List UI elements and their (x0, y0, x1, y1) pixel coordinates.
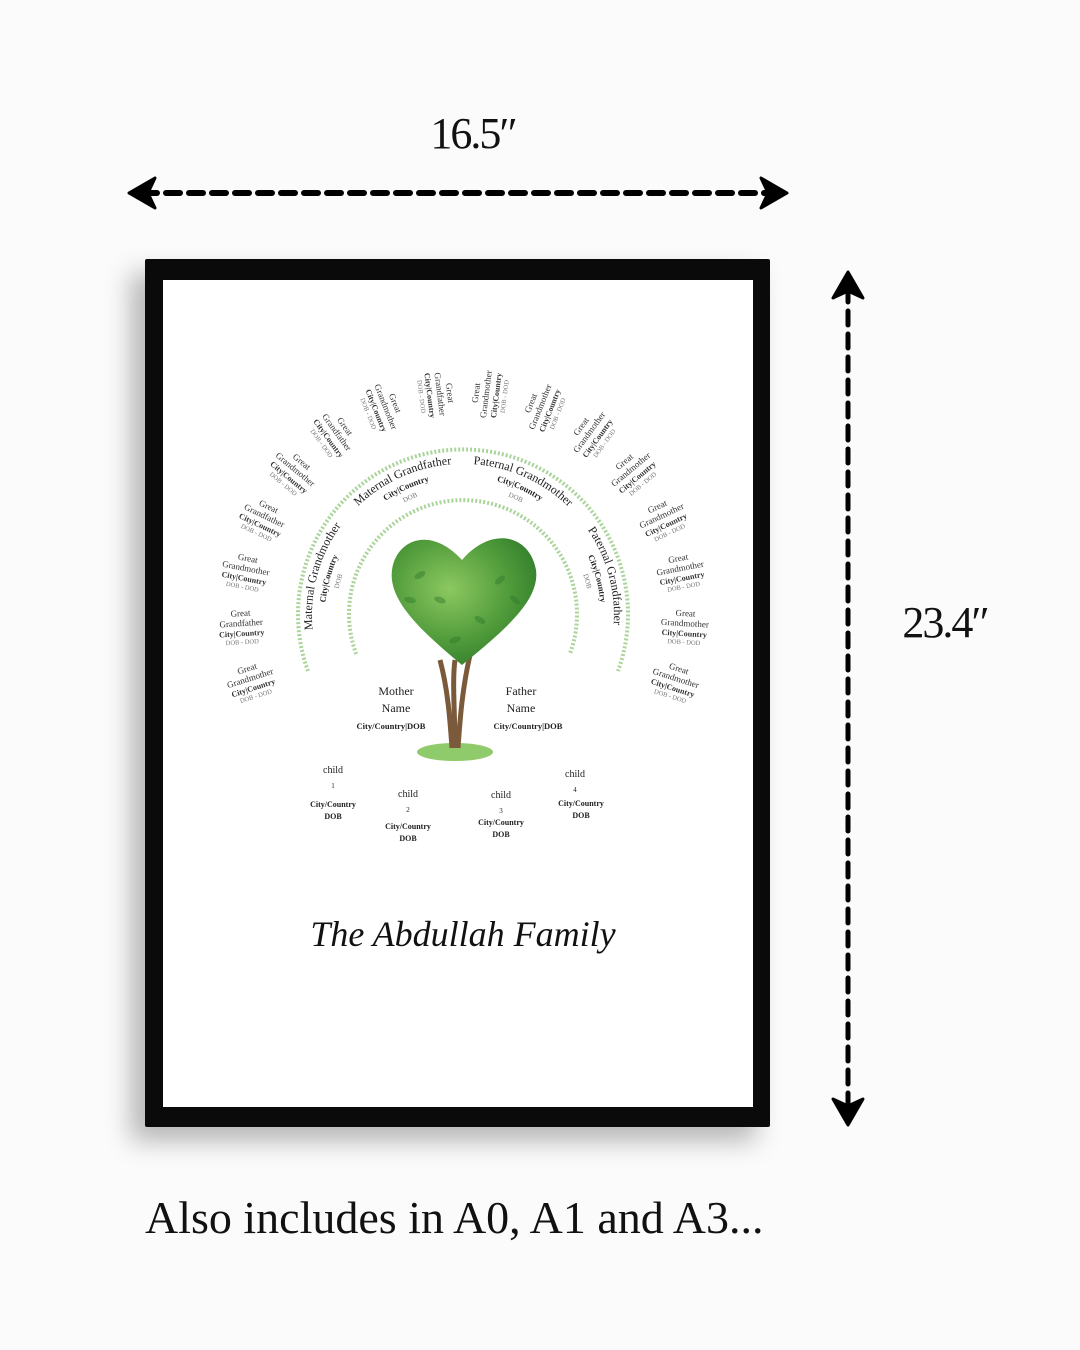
poster (163, 280, 753, 1107)
great-grandparent ring: City|Country (489, 372, 504, 418)
great-grandparent ring: Grandmother (221, 559, 270, 578)
great-grandparent ring: DOB - DOD (667, 638, 701, 647)
children: City/Country (478, 818, 524, 827)
children: City/Country (558, 799, 604, 808)
great-grandparent ring: Great (444, 382, 456, 404)
great-grandparent ring: Grandfather (219, 617, 263, 629)
great-grandparent ring: DOB - DOD (653, 523, 687, 544)
great-grandparent ring: City|Country (422, 372, 437, 418)
decorative arcs (298, 449, 628, 671)
great-grandparent ring: Grandfather (320, 412, 354, 453)
great-grandparent ring: Grandmother (638, 501, 685, 530)
great-grandparent ring: Great (335, 415, 355, 438)
great-grandparent ring: Great (237, 551, 259, 565)
great-grandparent ring: Great (675, 608, 696, 619)
great-grandparent ring: Grandmother (274, 450, 317, 489)
children: child (565, 769, 585, 780)
children: child (323, 765, 343, 776)
children: DOB (399, 834, 417, 843)
great-grandparent ring: Great (571, 415, 591, 437)
great-grandparent ring: DOB - DOD (225, 638, 259, 647)
children: City/Country (385, 822, 431, 831)
great-grandparent ring: Great (522, 391, 539, 414)
great-grandparent ring: Great (230, 608, 251, 619)
great-grandparent ring: City|Country (537, 388, 562, 433)
width label: 16.5″ (430, 109, 516, 158)
parents: Mother (378, 684, 414, 698)
parents: Name (382, 701, 410, 715)
family title: The Abdullah Family (310, 914, 616, 954)
parents: City/Country|DOB (357, 721, 426, 731)
great-grandparent ring: DOB - DOD (225, 581, 260, 594)
great-grandparent ring: DOB - DOD (358, 397, 377, 431)
children: 3 (499, 807, 503, 815)
great-grandparent ring: Great (470, 382, 482, 403)
great-grandparent ring: DOB - DOD (500, 379, 511, 413)
great-grandparent ring: City|Country (311, 417, 345, 459)
arrow: horizontal dimension (127, 176, 789, 210)
arrow: vertical dimension (831, 270, 864, 1127)
great-grandparent ring: Great (668, 661, 690, 677)
children: DOB (572, 811, 590, 820)
frame with poster (145, 259, 770, 1127)
great-grandparent ring: City|Country (659, 570, 705, 587)
children: child (398, 789, 418, 800)
great-grandparent ring: Grandmother (226, 666, 274, 690)
great-grandparent ring: DOB - DOD (309, 428, 334, 459)
great-grandparent ring: Great (613, 451, 635, 472)
children: 2 (406, 806, 410, 814)
children: City/Country (310, 800, 356, 809)
great-grandparent ring: City|Country (617, 459, 658, 495)
great-grandparent ring: Grandmother (656, 559, 705, 578)
great-grandparent ring: Grandmother (661, 617, 709, 630)
great-grandparent ring: City|Country (230, 677, 276, 699)
parents (357, 684, 563, 731)
great-grandparent ring: Grandmother (478, 370, 494, 419)
great-grandparent ring: Grandmother (527, 383, 554, 431)
great-grandparent ring: DOB - DOD (239, 688, 273, 705)
parents: City/Country|DOB (494, 721, 563, 731)
great-grandparent ring: Grandmother (652, 666, 700, 690)
great-grandparent ring: Grandfather (243, 502, 286, 529)
great-grandparent ring: Grandmother (571, 410, 607, 455)
great-grandparent ring: City|Country (268, 459, 309, 495)
great-grandparent ring: Great (236, 661, 259, 676)
parents: Father (506, 684, 536, 698)
heart tree (392, 538, 536, 761)
children: 1 (331, 782, 335, 790)
great-grandparent ring: City|Country (581, 417, 615, 459)
parents: Name (507, 701, 535, 715)
great-grandparent ring: DOB - DOD (268, 471, 298, 498)
great-grandparent ring: Great (646, 498, 669, 515)
great-grandparent ring: City|Country (661, 628, 707, 639)
great-grandparent ring (218, 368, 710, 707)
great-grandparent ring: City|Country (221, 570, 267, 587)
great-grandparent ring: DOB - DOD (628, 471, 658, 498)
children: DOB (324, 812, 342, 821)
bottom caption: Also includes in A0, A1 and A3... (145, 1192, 763, 1243)
great-grandparent ring: Great (667, 551, 689, 565)
grandparent ring: Maternal Grandmother Maternal Grandfather Paternal Grandmother Paternal Grandfather (304, 456, 622, 630)
great-grandparent ring: City|Country (644, 511, 688, 539)
great-grandparent ring: Grandfather (432, 372, 448, 416)
great-grandparent ring: City|Country (238, 511, 282, 539)
great-grandparent ring: DOB - DOD (667, 581, 701, 594)
children (310, 765, 604, 843)
children: DOB (492, 830, 510, 839)
height label: 23.4″ (902, 598, 988, 647)
great-grandparent ring: DOB - DOD (415, 380, 426, 414)
great-grandparent ring: DOB - DOD (653, 688, 687, 705)
great-grandparent ring: DOB - DOD (592, 428, 618, 459)
children: 4 (573, 786, 577, 794)
great-grandparent ring: Grandmother (372, 383, 399, 431)
great-grandparent ring: Great (291, 451, 313, 472)
great-grandparent ring: City|Country (650, 677, 696, 699)
great-grandparent ring: City|Country (364, 388, 389, 433)
great-grandparent ring: Grandmother (609, 450, 652, 489)
great-grandparent ring: Great (258, 498, 280, 516)
great-grandparent ring: Great (387, 392, 404, 415)
grandparent ring: City|Country City|Country City|Country City|Country (320, 476, 604, 602)
great-grandparent ring: DOB - DOD (549, 397, 568, 431)
grandparent ring: DOB DOB DOB DOB (334, 492, 592, 589)
children: child (491, 790, 511, 801)
great-grandparent ring: DOB - DOD (240, 523, 273, 544)
great-grandparent ring: City|Country (219, 628, 265, 639)
